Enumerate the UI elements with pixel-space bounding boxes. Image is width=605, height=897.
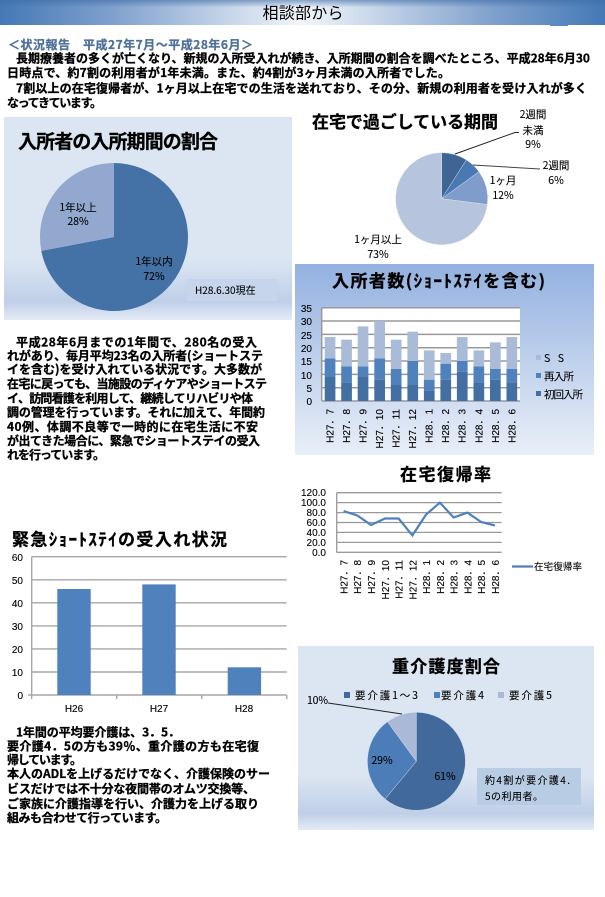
intro text block: 長期療養者の多くが亡くなり、新規の入所受入れが続き、入所期間の割合を調べたところ、平成28年6月30 [16,50,590,66]
line chart: home return rate: H28．4 [463,560,474,594]
stacked bar chart: admissions: H27．10 [375,409,386,448]
pie chart: length of stay [40,163,188,311]
line chart: home return rate [301,488,582,599]
stacked bar chart: admissions: H28．2 [441,409,452,443]
stacked bar chart: admissions: 10 [301,371,312,382]
line chart: home return rate: 0.0 [312,548,326,559]
stacked bar chart: admissions [301,304,584,448]
pie chart: care level: 10% [307,693,328,708]
pie chart: time at home: 2週間 [543,158,569,173]
bar chart: emergency short stay: 30 [12,622,23,633]
pie chart: time at home: 1ヶ月 [490,173,516,188]
legend: care level: 要介護1～3 [355,688,418,703]
line chart: home return rate: 120.0 [301,488,326,499]
line chart: home return rate: H28．5 [477,560,488,594]
heading: care level ratio: 重介護度割合 [392,652,500,678]
bar chart: emergency short stay: 40 [12,599,23,610]
legend: care level: 要介護4 [441,688,484,703]
intro text block: 7割以上の在宅復帰者が、1ヶ月以上在宅での生活を送れており、その分、新規の利用者を受け入れが多く [16,80,587,96]
left text block: care level summary: ビスだけでは不十分な夜間帯のオムツ交換等、 [7,780,255,797]
line chart: home return rate: 80.0 [307,508,326,519]
left text block: admissions summary: 40例、体調不良等で一時的に在宅生活に不安 [7,418,258,435]
line chart: home return rate: H28．6 [491,560,502,594]
pie chart: time at home: 6% [548,173,564,188]
stacked bar chart: admissions: H28．3 [458,409,469,443]
left text block: admissions summary: イ、訪問看護を利用して、継続してリハビリや体 [7,390,253,406]
stacked bar chart: admissions: 35 [301,304,312,315]
heading: emergency short stay: 緊急ｼｮｰﾄｽﾃｲの受入れ状況 [12,526,227,550]
bar chart: emergency short stay: 20 [12,645,23,656]
pie chart: time at home: 12% [492,188,514,203]
stacked bar chart: admissions: H28．5 [491,409,502,443]
left text block: admissions summary: 調の管理を行っています。それに加えて、年間約 [7,404,265,420]
panel: admissions [295,264,594,455]
intro text block: 日時点で、約7割の利用者が1年未満。また、約4割が3ヶ月未満の入所者でした。 [7,64,450,81]
stacked bar chart: admissions: H28．4 [474,409,485,443]
pie chart: time at home: 9% [525,137,541,152]
stacked bar chart: admissions: 5 [306,384,312,395]
legend: admissions: 再入所 [544,369,574,384]
left text block: care level summary: ご家族に介護指導を行い、介護力を上げる取り [7,795,259,812]
stacked bar chart: admissions: H28．1 [425,409,436,443]
line chart: home return rate: H27．7 [340,560,350,594]
bar chart: emergency short stay: H28 [235,704,254,715]
intro text block [7,50,590,111]
callout: 約4割が要介護4. [485,772,570,787]
date note [187,279,277,301]
stacked bar chart: admissions: H28．6 [507,409,518,443]
left text block: admissions summary: 平成28年6月までの1年間で、280名の受入 [16,334,257,350]
line chart: home return rate: 60.0 [307,518,326,529]
pie chart: time at home: 未満 [522,123,544,138]
left text block: admissions summary: イを含む)を受け入れている状況です。大多数が [7,360,262,378]
left text block: care level summary: 1年間の平均要介護は、3．5． [16,724,180,740]
legend: home return rate: 在宅復帰率 [534,559,582,573]
panel: length of stay [4,117,292,320]
line chart: home return rate: H27．8 [353,560,364,594]
callout: 5の利用者。 [485,788,543,803]
pie chart: care level: 29% [371,753,393,768]
line chart: home return rate: H27．9 [367,560,378,594]
panel: care level ratio [298,646,594,830]
bar chart: emergency short stay [12,553,287,715]
legend: admissions: SS [544,351,564,366]
left text block: care level summary: 帰しています。 [7,751,82,768]
left text block: care level summary: 組みも合わせて行っています。 [7,809,167,826]
stacked bar chart: admissions: H27．11 [392,409,403,448]
pie chart: length of stay: 72% [143,269,165,284]
pie chart: time at home: 1ヶ月以上 [354,232,402,247]
left text block: care level summary: 要介護4．5の方も39％、重介護の方も在宅復 [7,738,259,754]
heading: length of stay: 入所者の入所期間の割合 [18,127,218,154]
left text block: care level summary [7,724,270,826]
left text block: admissions summary: 在宅に戻っても、当施設のディケアやショートステ [7,375,267,392]
bar chart: emergency short stay: 0 [17,691,23,702]
pie chart: time at home [354,107,569,262]
line chart: home return rate: 20.0 [307,538,326,549]
stacked bar chart: admissions: H27．8 [342,409,353,443]
stacked bar chart: admissions: H27．12 [408,409,419,448]
line chart: home return rate: H28．1 [422,560,433,594]
left text block: admissions summary: れを行っています。 [7,446,105,463]
left text block: admissions summary [7,334,267,463]
line chart: home return rate: H28．3 [450,560,460,594]
stacked bar chart: admissions: H27．7 [326,409,336,443]
pie chart: length of stay: 28% [67,214,89,229]
pie chart: care level: 61% [434,769,456,784]
line chart: home return rate: H28．2 [436,560,447,594]
legend: home return rate [512,559,582,573]
line chart: home return rate: 100.0 [301,498,326,509]
page title: 相談部から [262,0,344,24]
left text block: care level summary: 本人のADLを上げるだけでなく、介護保険のサー [7,765,270,782]
line chart: home return rate: H27．10 [381,560,392,599]
header band [0,0,605,26]
bar chart: emergency short stay: 10 [12,668,23,679]
line chart: home return rate: H27．11 [394,560,406,599]
line chart: home return rate: H27．12 [408,560,419,599]
pie chart: care level [307,693,465,810]
left text block: admissions summary: が出てきた場合に、緊急でショートステイの受入 [7,432,260,449]
status report heading: ＜状況報告 平成27年7月～平成28年6月＞ [8,36,253,53]
stacked bar chart: admissions: H27．9 [358,409,370,443]
stacked bar chart: admissions: 25 [301,331,312,342]
pie chart: time at home: 2週間 [520,107,546,122]
bar chart: emergency short stay: H27 [150,704,169,715]
bar chart: emergency short stay: 60 [12,553,23,564]
bar chart: emergency short stay: 50 [12,576,23,587]
stacked bar chart: admissions: 20 [301,344,312,355]
pie chart: length of stay: 1年以内 [135,254,173,269]
legend: care level [344,688,552,703]
heading: admissions: 入所者数(ｼｮｰﾄｽﾃｲを含む) [332,267,545,292]
bar chart: emergency short stay: H26 [65,704,84,715]
callout [477,768,581,805]
date note: H28.6.30現在 [195,282,256,297]
stacked bar chart: admissions: 15 [301,357,312,368]
stacked bar chart: admissions: 0 [306,397,312,408]
left text block: admissions summary: れがあり、毎月平均23名の入所者(ショートステ [7,347,263,364]
heading: time at home: 在宅で過ごしている期間 [312,108,498,133]
legend: admissions [536,351,584,402]
stacked bar chart: admissions: 30 [301,317,312,328]
intro text block: なってきています。 [7,94,102,111]
legend: admissions: 初回入所 [544,387,584,402]
pie chart: time at home: 73% [367,247,389,262]
heading: home return rate: 在宅復帰率 [400,460,491,486]
pie chart: length of stay: 1年以上 [59,200,97,215]
legend: care level: 要介護5 [509,688,552,703]
line chart: home return rate: 40.0 [307,528,326,539]
